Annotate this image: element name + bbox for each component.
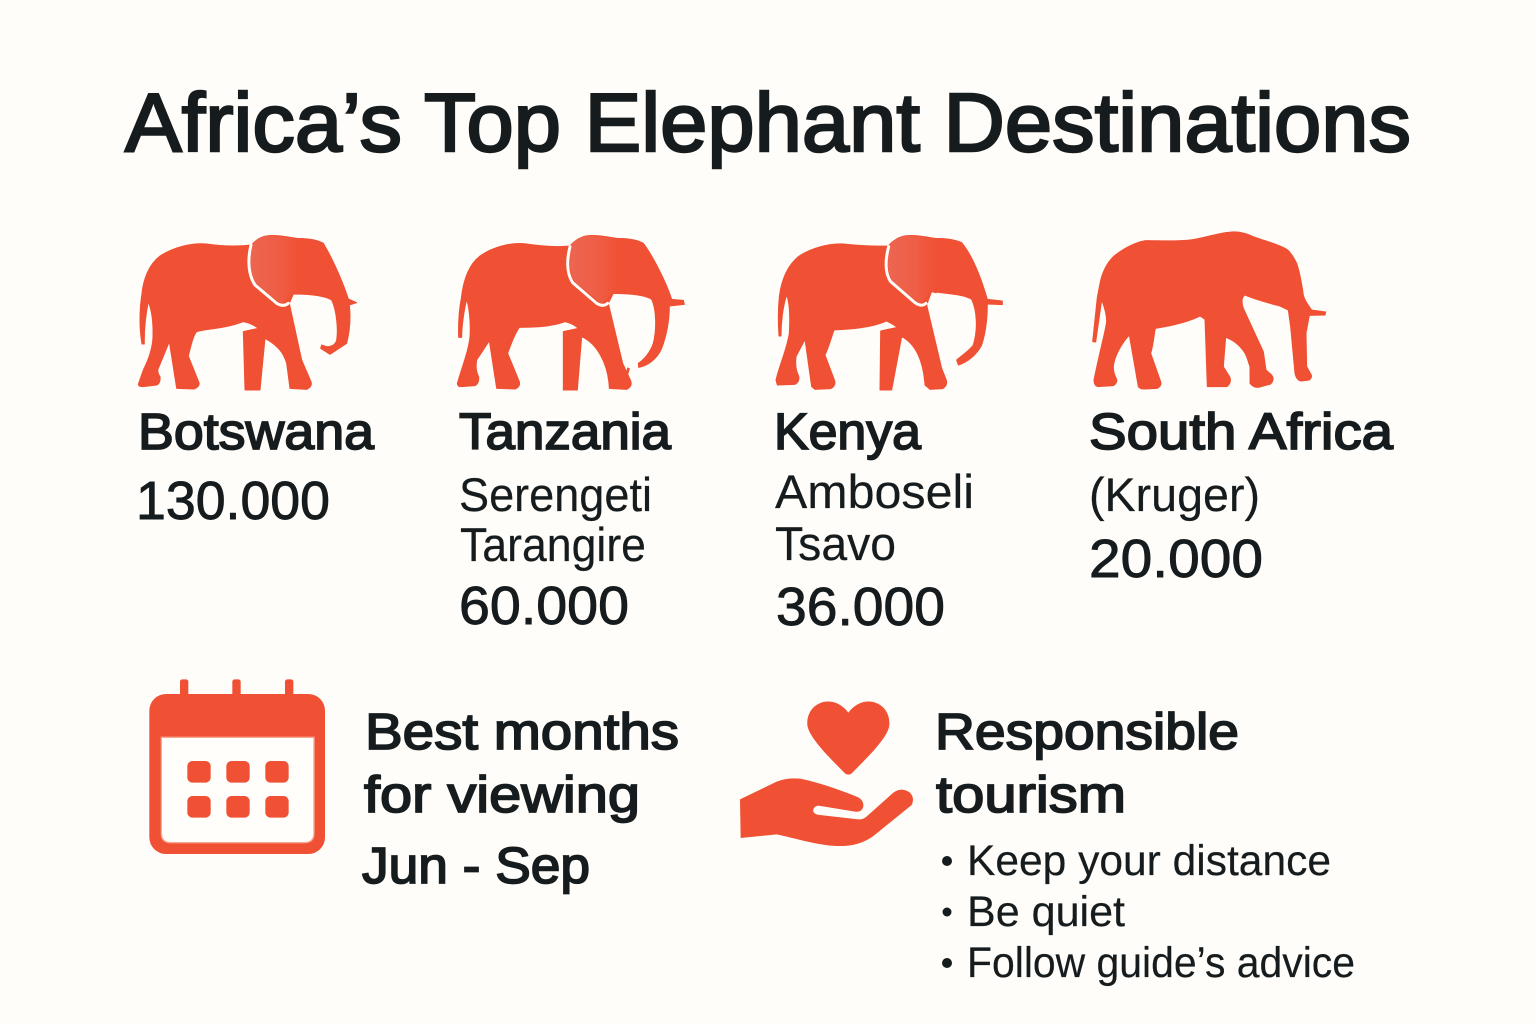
tip: follow guide's advice: Follow guide’s advice: [967, 939, 1355, 987]
tip: be quiet: Be quiet: [967, 888, 1125, 936]
heading: best months for viewing: Best months: [365, 703, 679, 760]
panel: best months: [149, 679, 679, 894]
park: Kruger: (Kruger): [1089, 468, 1260, 521]
icon: hand holding heart: [740, 701, 913, 846]
heading: responsible tourism: Responsible: [935, 703, 1239, 760]
tip: keep your distance: Keep your distance: [967, 837, 1331, 885]
park: Serengeti: Serengeti: [459, 468, 652, 521]
country name: Tanzania: [459, 403, 672, 460]
icon: elephant South Africa: [1093, 232, 1326, 389]
panel: Kenya: [774, 236, 1002, 637]
elephant count: 20.000: [1089, 529, 1263, 589]
park: Tsavo: Tsavo: [775, 517, 896, 570]
panel: Tanzania: [457, 236, 684, 636]
heading: best months for viewing: [364, 703, 679, 823]
panel: Botswana: [136, 236, 375, 531]
elephant count: 130.000: [136, 471, 330, 531]
country name: Kenya: [774, 403, 922, 460]
elephant count: 36.000: [776, 577, 945, 637]
icon: elephant Botswana: [138, 236, 357, 390]
icon: calendar: [149, 679, 325, 854]
heading: responsible tourism: tourism: [936, 766, 1126, 823]
country name: Botswana: [138, 403, 375, 460]
panel: responsible tourism: [740, 701, 1355, 987]
icon: elephant Tanzania: [457, 236, 684, 390]
date range: Jun - Sep: [362, 837, 590, 894]
title: Africa’s Top Elephant Destinations: [125, 76, 1411, 169]
panel: South Africa: [1089, 232, 1394, 589]
heading: responsible tourism: [935, 703, 1239, 823]
park: Tarangire: Tarangire: [460, 518, 646, 571]
icon: elephant Kenya: [776, 236, 1002, 390]
elephant count: 60.000: [459, 576, 629, 636]
country name: South Africa: [1089, 403, 1394, 460]
heading: best months for viewing: for viewing: [364, 766, 640, 823]
park: Amboseli: Amboseli: [775, 465, 974, 518]
